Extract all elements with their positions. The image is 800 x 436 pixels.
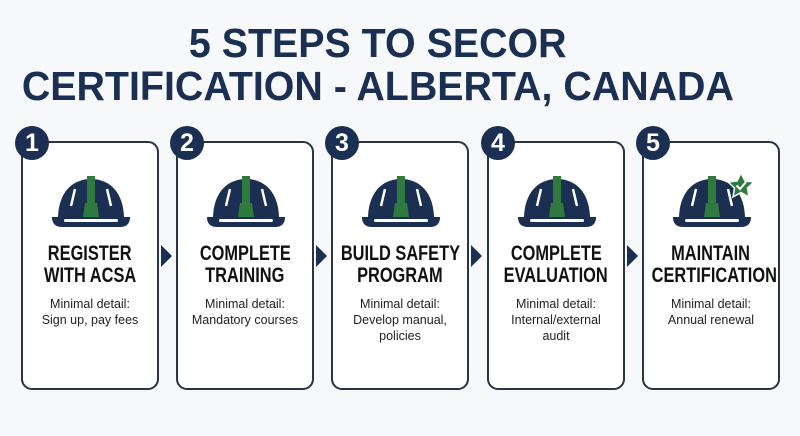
heading: WITH ACSA [44,264,136,287]
text: policies [379,329,421,343]
icon: hard hat with star [673,174,752,227]
badge 3 [325,126,359,160]
title: 5 STEPS TO SECOR [189,20,567,66]
text [511,297,601,343]
text [668,297,754,327]
arrow [471,245,482,267]
panel: step 4 [487,141,625,390]
panel: step 5 [642,141,780,390]
heading: CERTIFICATION [652,264,777,287]
panel: step 2 [176,141,314,390]
icon: hard hat [362,176,440,227]
heading [340,242,460,287]
title: CERTIFICATION - ALBERTA, CANADA [22,63,734,109]
text: Minimal detail: [50,297,130,311]
badge 4 [481,126,515,160]
badge 1 [15,126,49,160]
text: Minimal detail: [516,297,596,311]
heading: REGISTER [48,242,132,265]
text [192,297,298,327]
arrow [316,245,327,267]
badge 5: 5 [646,129,660,157]
badge 2: 2 [180,129,194,157]
arrow [627,245,638,267]
badge 2 [170,126,204,160]
badge 4: 4 [491,129,505,157]
text: Internal/external [511,313,601,327]
text: Mandatory courses [192,313,298,327]
text [42,297,138,327]
icon: hard hat [518,176,596,227]
icon: hard hat [52,176,130,227]
text: Sign up, pay fees [42,313,138,327]
heading [44,242,136,287]
text [353,297,447,343]
heading: COMPLETE [510,242,601,265]
badge 3: 3 [335,129,349,157]
text: Minimal detail: [671,297,751,311]
badge 1: 1 [25,129,39,157]
heading: MAINTAIN [672,242,750,265]
icon: hard hat [207,176,285,227]
panel: step 3 [331,141,469,390]
heading [504,242,608,287]
text: audit [542,329,570,343]
badge 5 [636,126,670,160]
heading [652,242,777,287]
text: Annual renewal [668,313,754,327]
heading: BUILD SAFETY [340,242,460,265]
text: Minimal detail: [360,297,440,311]
heading: EVALUATION [504,264,608,287]
heading: COMPLETE [199,242,290,265]
heading: TRAINING [205,264,285,287]
panel: step 1 [21,141,159,390]
heading: PROGRAM [357,264,443,287]
heading [199,242,290,287]
title [22,20,734,109]
arrow [161,245,172,267]
text: Develop manual, [353,313,447,327]
text: Minimal detail: [205,297,285,311]
